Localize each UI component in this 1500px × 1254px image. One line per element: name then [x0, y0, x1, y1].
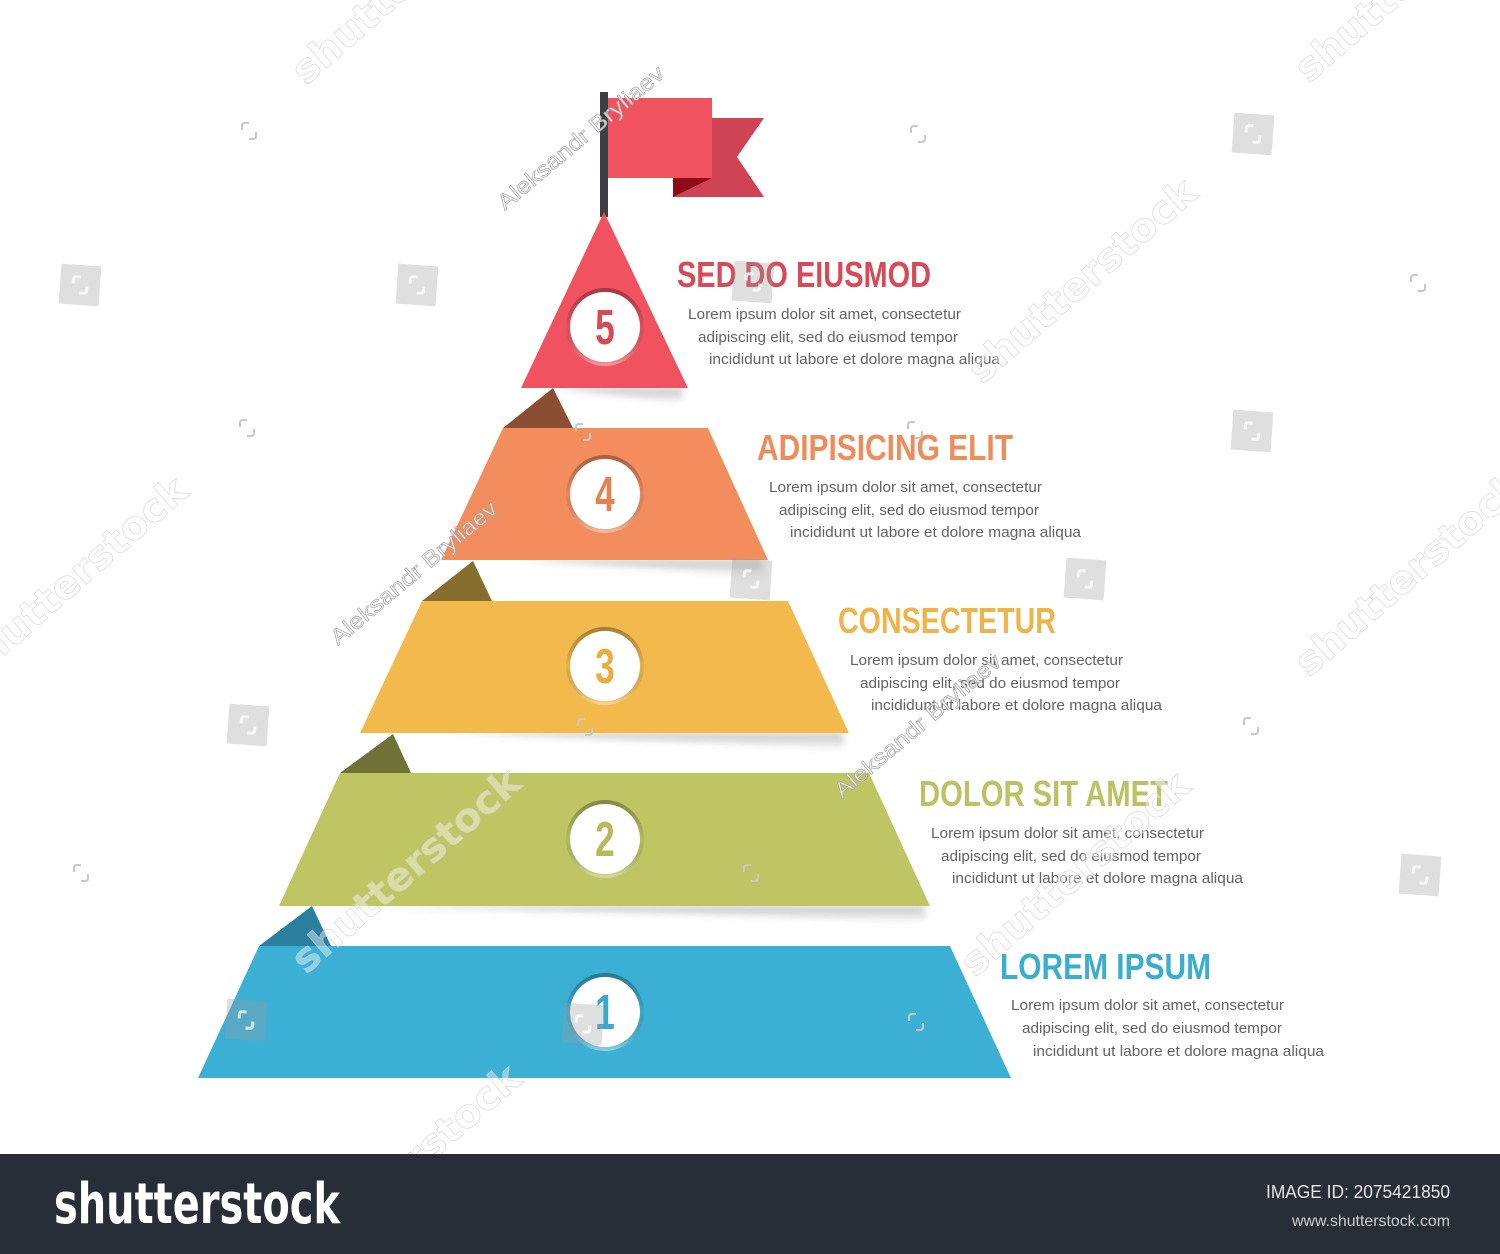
- tier 4 number ring: [566, 455, 644, 533]
- body text 5: incididunt ut labore et dolore magna aliqua: [709, 352, 1001, 368]
- body text 5: [688, 307, 1001, 368]
- tier 4 shape: [441, 428, 768, 560]
- tier 5 number: 5: [595, 300, 615, 355]
- body text 2: incididunt ut labore et dolore magna aliqua: [952, 871, 1244, 887]
- watermark overlay: shutterstock: [959, 169, 1207, 393]
- tier 2 number ring: [566, 800, 644, 878]
- label: dolor sit amet: [919, 773, 1244, 887]
- tier 2 band: [279, 734, 930, 923]
- tier 3 number badge: [570, 631, 640, 701]
- tier 4 number badge: [570, 459, 640, 529]
- body text 3: adipiscing elit, sed do eiusmod tempor: [860, 676, 1120, 692]
- tier 4 band: [441, 388, 768, 577]
- footer url: www.shutterstock.com: [1291, 1213, 1450, 1230]
- icon: flag back ribbon: [673, 118, 764, 197]
- tier 1 shape: [198, 946, 1011, 1078]
- body text 1: incididunt ut labore et dolore magna aliqua: [1033, 1044, 1325, 1060]
- tier 3 band: [360, 561, 849, 750]
- body text 5: adipiscing elit, sed do eiusmod tempor: [698, 330, 958, 346]
- shadow under tier 4: [520, 560, 764, 577]
- heading 3: CONSECTETUR: [838, 600, 1056, 641]
- tier 5 triangle: [521, 212, 688, 404]
- label: consectetur: [838, 600, 1163, 714]
- icon: flag front: [608, 98, 712, 178]
- tier 1 band: [198, 906, 1011, 1078]
- body text 2: Lorem ipsum dolor sit amet, consectetur: [931, 826, 1204, 842]
- label: adipisicing elit: [757, 427, 1082, 541]
- body text 4: [769, 480, 1082, 541]
- flag on pyramid top: [600, 92, 764, 217]
- body text 1: adipiscing elit, sed do eiusmod tempor: [1022, 1021, 1282, 1037]
- tier 2 shape: [279, 773, 930, 906]
- heading 4: ADIPISICING ELIT: [757, 427, 1013, 468]
- tier 2 number badge: [570, 804, 640, 874]
- tier 2 fold: [340, 734, 411, 773]
- body text 4: adipiscing elit, sed do eiusmod tempor: [779, 503, 1039, 519]
- body text 2: adipiscing elit, sed do eiusmod tempor: [941, 849, 1201, 865]
- label: lorem ipsum: [1000, 946, 1325, 1060]
- body text 3: [850, 653, 1163, 714]
- heading 2: DOLOR SIT AMET: [919, 773, 1168, 814]
- footer image id: IMAGE ID: 2075421850: [1266, 1182, 1450, 1202]
- tier 3 number ring: [566, 627, 644, 705]
- tier 1 number ring: [566, 973, 644, 1051]
- body text 3: Lorem ipsum dolor sit amet, consectetur: [850, 653, 1123, 669]
- label: sed do eiusmod: [677, 254, 1001, 368]
- footer logo: shutterstock: [54, 1172, 341, 1237]
- body text 2: [931, 826, 1244, 887]
- footer bar: [0, 1154, 1500, 1254]
- tier 5 number badge: [570, 292, 640, 362]
- body text 3: incididunt ut labore et dolore magna aliqua: [871, 698, 1163, 714]
- watermark overlay: Aleksandr Bryliaev: [325, 496, 502, 650]
- watermark overlay: Aleksandr Bryliaev: [492, 61, 669, 215]
- body text 4: incididunt ut labore et dolore magna aliqua: [790, 525, 1082, 541]
- shadow under tier 5: [555, 388, 684, 404]
- tier 1 number badge: [570, 977, 640, 1047]
- icon: flag pole: [600, 92, 608, 217]
- watermark overlay: shutterstock: [952, 762, 1200, 986]
- shadow under tier 2: [380, 906, 926, 923]
- tier 4 number: 4: [595, 467, 615, 522]
- icon: flag fold: [673, 178, 712, 197]
- tier 3 fold: [422, 561, 492, 601]
- heading 5: SED DO EIUSMOD: [677, 254, 931, 295]
- tier 5 number ring: [566, 288, 644, 366]
- tier 1 number: 1: [595, 985, 615, 1040]
- tier 3 number: 3: [595, 639, 615, 694]
- body text 1: [1011, 998, 1325, 1060]
- body text 5: Lorem ipsum dolor sit amet, consectetur: [688, 307, 961, 323]
- shadow under tier 3: [450, 733, 845, 750]
- tier 4 fold: [503, 388, 573, 428]
- heading 1: LOREM IPSUM: [1000, 946, 1211, 987]
- tier 1 fold: [259, 906, 331, 946]
- tier 3 shape: [360, 601, 849, 733]
- tier 5 shape: [521, 212, 688, 388]
- watermark overlay: shutterstock: [283, 759, 531, 983]
- watermark overlay: Aleksandr Bryliaev: [829, 649, 1006, 803]
- body text 4: Lorem ipsum dolor sit amet, consectetur: [769, 480, 1042, 496]
- body text 1: Lorem ipsum dolor sit amet, consectetur: [1011, 998, 1284, 1014]
- tier 2 number: 2: [595, 812, 615, 867]
